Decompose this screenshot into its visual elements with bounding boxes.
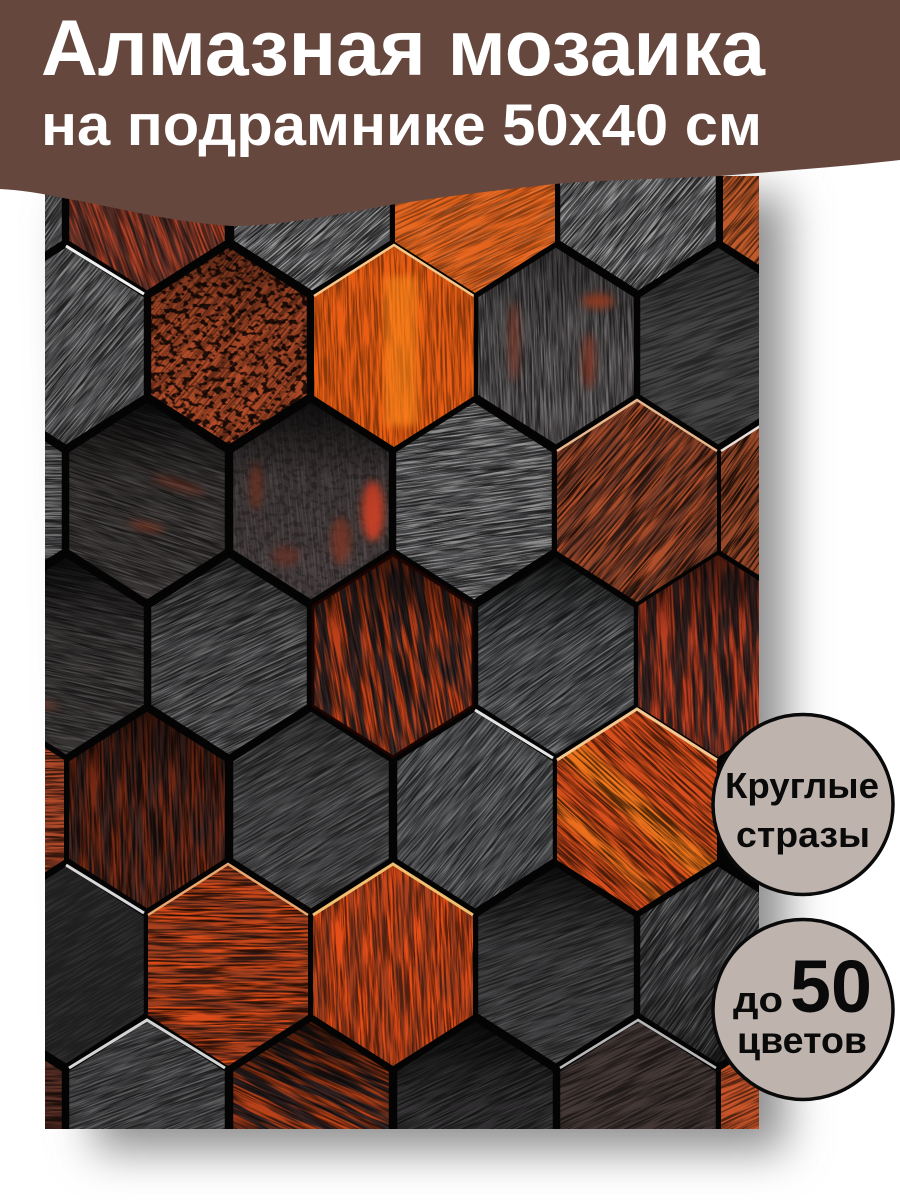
hexagon A2: red brown — [69, 199, 225, 290]
badge: up to 50 colours: 50 — [790, 945, 872, 1028]
hexagon F2: orange red horizontal grain — [147, 862, 309, 1066]
hexagon A5: gray — [560, 176, 716, 290]
hexagon E2: dark red wood — [69, 712, 225, 908]
hexagon B4: gray with red patches — [474, 248, 634, 444]
hexagon G6: orange sliver — [721, 1064, 759, 1129]
hexagon D3: dark red streaked — [312, 554, 474, 758]
hexagon C1: gray sliver — [45, 442, 62, 560]
hexagon F1: black — [45, 864, 145, 1064]
hexagon C5: brown orange — [556, 398, 718, 602]
header banner — [0, 0, 900, 226]
badge: round rhinestones: Круглые — [725, 765, 879, 806]
hexagon D4: dark gray — [474, 558, 634, 754]
badge: up to 50 colours — [713, 920, 893, 1100]
hexagon C2: dark with red marks — [69, 405, 225, 600]
hexagon D1: dark — [45, 558, 144, 754]
subtitle: на подрамнике 50х40 см — [41, 93, 762, 158]
canvas with hexagon mosaic — [45, 176, 759, 1129]
hexagon D5: red streaked — [638, 555, 759, 757]
hexagon row A: gray sliver — [45, 194, 62, 252]
hexagon D2: gray — [151, 558, 307, 754]
badge: up to 50 colours: до — [733, 979, 783, 1020]
hexagon B3: bright orange — [313, 244, 474, 447]
hexagon A6: orange sliver — [723, 176, 759, 265]
hexagon G2: gray — [68, 1018, 226, 1129]
hexagon E4: gray — [394, 708, 554, 908]
hexagon G4: dark — [397, 1023, 553, 1129]
hexagon G3: dark red — [233, 1022, 389, 1129]
hexagon C3: dark with red patches — [233, 403, 389, 600]
hexagon F4: dark — [474, 868, 634, 1064]
hexagon C6: brown sliver — [720, 425, 759, 576]
title: Алмазная мозаика — [41, 3, 766, 92]
hexagon A3: gray — [234, 205, 390, 290]
badge: up to 50 colours: цветов — [737, 1020, 867, 1061]
hexagon B5: dark gray — [640, 248, 759, 444]
hexagon B1: gray — [45, 244, 145, 444]
hexagon A4: orange — [395, 184, 555, 293]
hexagon B2: speckled red — [151, 248, 307, 444]
hexagon E5: orange — [556, 707, 718, 911]
hexagon C4: gray — [396, 402, 552, 600]
hexagon F3: orange vertical grain — [312, 862, 474, 1066]
hexagon F5: dark with light streaks — [640, 866, 759, 1063]
hexagon E1: red sliver — [45, 748, 64, 872]
canvas drop shadow — [70, 195, 785, 1150]
hexagon G5: dark brown — [559, 1018, 717, 1129]
badge: round rhinestones — [713, 714, 893, 894]
hexagon G1: brown sliver — [45, 1060, 62, 1129]
badge: round rhinestones: стразы — [736, 814, 870, 855]
hexagon E3: gray — [233, 707, 392, 908]
